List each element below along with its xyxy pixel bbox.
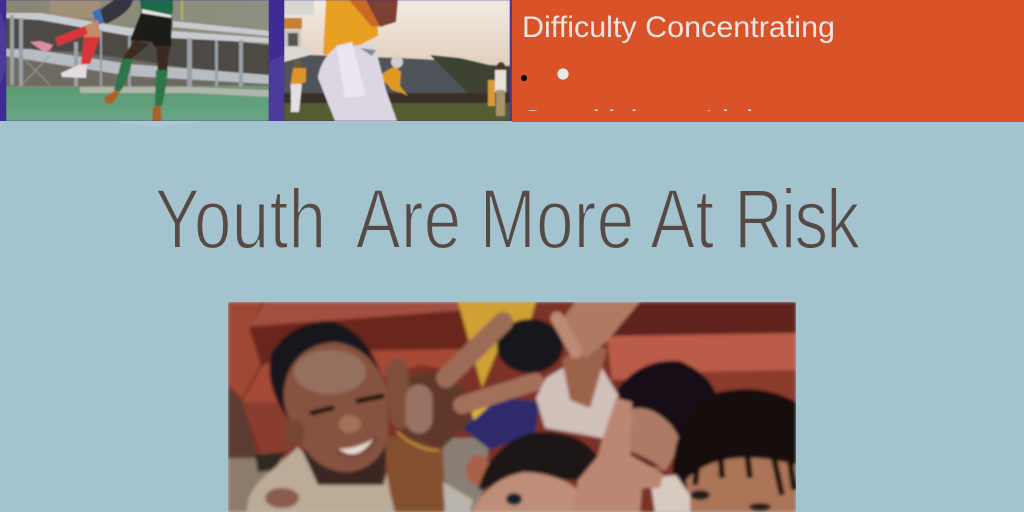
list bullet: black (521, 75, 527, 81)
left player (30, 0, 133, 78)
face (284, 342, 388, 472)
press box building (284, 0, 314, 61)
orange panel: symptom list (510, 0, 1024, 122)
list bullet: white (557, 68, 569, 80)
photo: smiling children making peace signs (228, 302, 796, 512)
purple backing band (0, 0, 512, 127)
hair (270, 322, 387, 425)
raised hand and sleeve (536, 302, 640, 440)
grandstand (284, 54, 468, 94)
tree line and crowd (430, 54, 510, 94)
photo: football player in orange at sunset (284, 0, 510, 121)
child at right (673, 389, 796, 512)
shirt (247, 447, 408, 512)
text: clipped second symptom: Sensitivity to Light (522, 105, 773, 138)
child behind: yellow shirt, head, blue shirt (458, 302, 563, 485)
title: Risk (734, 173, 861, 267)
laughing child (617, 361, 717, 470)
foreground player (318, 0, 398, 121)
title: Are (356, 173, 462, 267)
title: More (480, 173, 634, 267)
background players (290, 56, 506, 116)
boy's peace-sign hand and arm (386, 322, 535, 512)
child at bottom centre (472, 432, 598, 512)
boy at left (247, 322, 408, 512)
blurred foreground hand (573, 398, 663, 512)
neck (302, 440, 387, 485)
text: difficulty concentrating: Difficulty Concentrating (522, 11, 835, 44)
striped cuff (650, 475, 690, 512)
title: At (650, 173, 714, 267)
bleacher railing (6, 13, 269, 95)
sleeve at lower left of centre child (443, 482, 473, 512)
right player (104, 0, 173, 121)
title: Youth (155, 173, 326, 267)
brick steps (228, 302, 796, 512)
photo: players jumping on a field (6, 0, 269, 121)
